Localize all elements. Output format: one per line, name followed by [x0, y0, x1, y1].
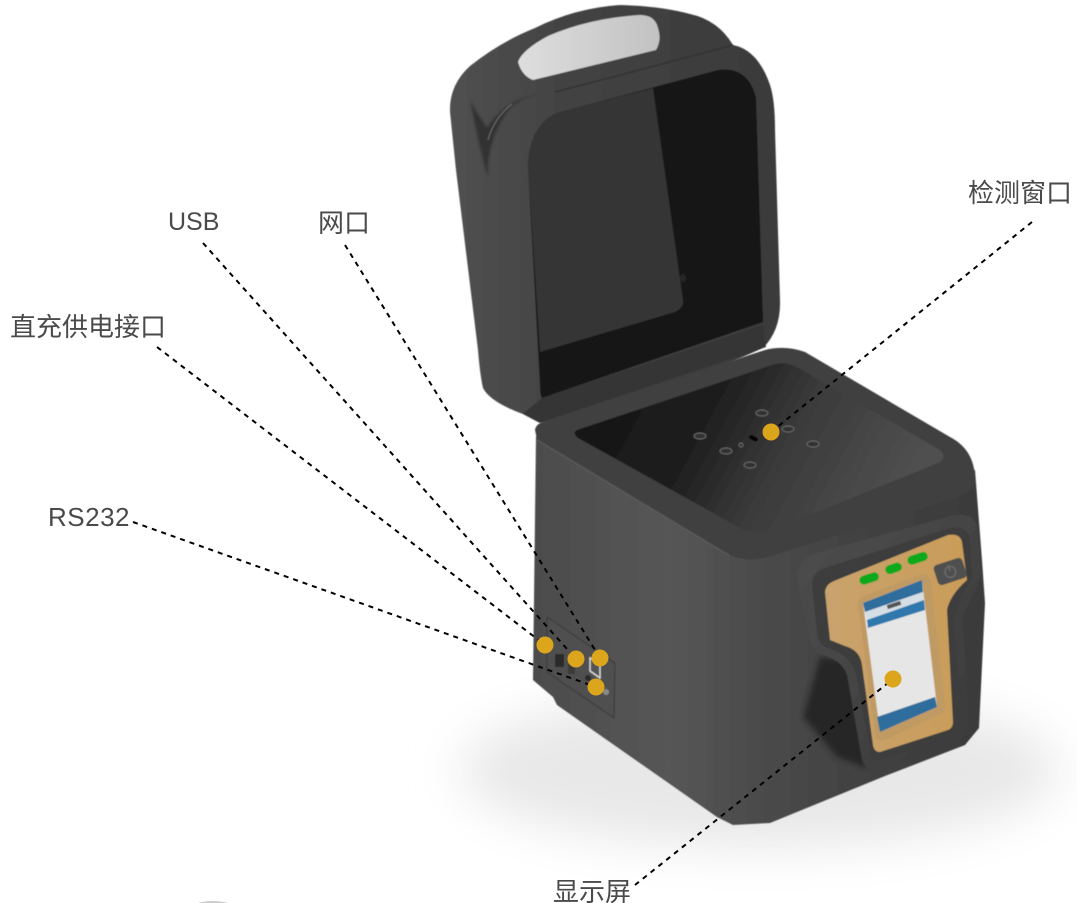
callout lines	[133, 222, 1032, 885]
detection window slit	[749, 434, 758, 442]
handle side recess	[470, 92, 548, 178]
device lid	[450, 5, 780, 423]
base top rim	[535, 348, 975, 559]
line: DC power	[157, 347, 545, 645]
line: RS232	[133, 522, 596, 687]
rim edge highlight	[537, 440, 730, 556]
screen top bar	[863, 580, 923, 612]
label: USB: USB	[168, 208, 219, 236]
screen bezel	[858, 574, 945, 740]
device base	[533, 348, 985, 825]
display housing	[797, 515, 981, 771]
lid handle opening	[518, 15, 660, 80]
tan control panel	[825, 535, 967, 752]
label: RS232: RS232	[48, 502, 130, 532]
LED: green indicator 3	[906, 551, 929, 566]
lid inner light panel	[528, 88, 683, 352]
lid hinge band	[523, 325, 766, 423]
callout dots	[536, 424, 902, 696]
port panel	[547, 617, 615, 718]
line: network port	[345, 245, 600, 658]
label: network port: 网口	[318, 208, 370, 238]
DC power port	[555, 654, 564, 667]
RS232 screws	[585, 675, 591, 681]
label: DC power port: 直充供电接口	[10, 312, 166, 342]
touch screen	[863, 580, 937, 732]
LED: green indicator 2	[884, 561, 903, 575]
lid outer shell	[450, 5, 780, 423]
bottom edge mark	[198, 901, 228, 903]
lid inner frame ridge	[555, 45, 733, 92]
network port	[590, 658, 600, 678]
label: detection window: 检测窗口	[968, 178, 1072, 208]
housing inner ring	[812, 528, 972, 760]
icon: power button	[933, 557, 968, 586]
screen tab strip	[867, 600, 925, 628]
display recess shadow	[803, 657, 885, 768]
recess highlight	[488, 104, 512, 140]
inspection tray	[575, 363, 944, 533]
line: display	[635, 679, 893, 885]
line: USB	[203, 243, 576, 659]
USB port	[568, 664, 575, 674]
line: detection window	[771, 222, 1032, 432]
floor shadow	[460, 692, 1060, 848]
LED: green indicator 1	[858, 571, 880, 586]
screen tab bar	[877, 697, 937, 732]
tray screws and window	[694, 410, 819, 468]
screen title band	[865, 592, 924, 620]
lid cavity	[528, 70, 763, 398]
base body	[533, 436, 985, 825]
